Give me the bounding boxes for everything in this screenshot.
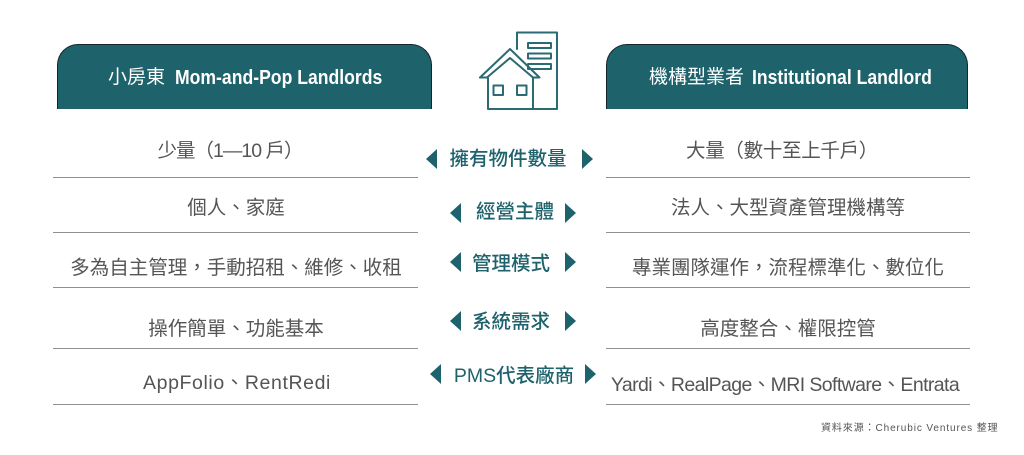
header: mom-and-pop landlords: 小房東 (108, 67, 165, 88)
left column: row 5 text: AppFolio、RentRedi (143, 372, 331, 394)
left column: row 4 text: 操作簡單、功能基本 (148, 318, 324, 340)
arrow: left (426, 149, 437, 169)
header: mom-and-pop landlords: Mom-and-Pop Landlords (175, 67, 382, 89)
left column: row 2 text: 個人、家庭 (187, 197, 285, 219)
right column: row 5 text: Yardi、RealPage、MRI Software、Entrata (611, 374, 959, 396)
arrow: right (582, 149, 593, 169)
header: institutional landlord: Institutional Landlord (752, 67, 932, 89)
arrow: right (565, 252, 576, 272)
right column: row 4 text: 高度整合、權限控管 (700, 318, 876, 340)
arrow: left (450, 252, 461, 272)
source note: 資料來源：Cherubic Ventures 整理 (821, 423, 999, 434)
arrow: left (450, 203, 461, 223)
right column: row 2 text: 法人、大型資產管理機構等 (671, 197, 905, 219)
arrow: left (430, 364, 441, 384)
center label: system needs: 系統需求 (472, 311, 550, 333)
center label: operator: 經營主體 (476, 201, 554, 223)
arrow: right (565, 311, 576, 331)
header: institutional landlord (606, 44, 968, 109)
center label: PMS vendors: PMS代表廠商 (454, 365, 574, 387)
center label: management model: 管理模式 (472, 253, 550, 275)
header: mom-and-pop landlords (57, 44, 432, 109)
arrow: right (565, 203, 576, 223)
center label: property count: 擁有物件數量 (449, 148, 567, 170)
icon: house and building (479, 32, 558, 110)
header: institutional landlord: 機構型業者 (649, 67, 744, 88)
arrow: right (585, 364, 596, 384)
arrow: left (450, 311, 461, 331)
left column: row 1 text: 少量（1—10 戶） (158, 140, 302, 162)
right column: row 3 text: 專業團隊運作，流程標準化、數位化 (632, 257, 944, 279)
right column: row 1 text: 大量（數十至上千戶） (686, 140, 878, 162)
left column: row 3 text: 多為自主管理，手動招租、維修、收租 (70, 257, 402, 279)
